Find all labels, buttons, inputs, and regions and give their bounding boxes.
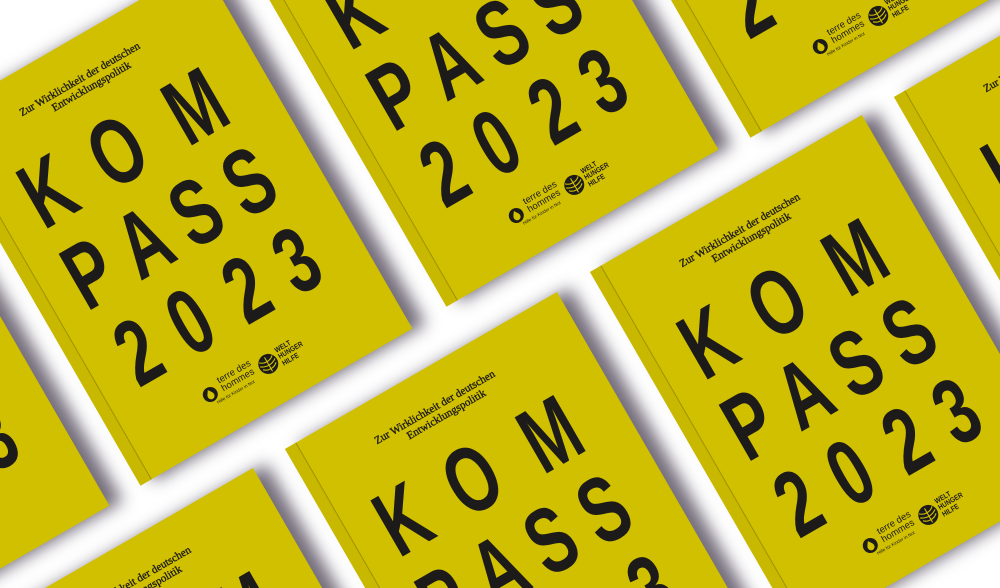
book: bottom center, partial — [285, 292, 767, 588]
book: main right cover — [590, 115, 1000, 588]
title: KOMPASS 2023: 2 — [511, 55, 594, 164]
title: KOMPASS 2023: 2 — [205, 234, 288, 343]
book: bottom left, partial — [0, 468, 463, 588]
logo: terre des hommes: Hilfe für Kinder in Not — [216, 379, 256, 405]
logo: terre des hommes — [202, 358, 257, 405]
subtitle: Zur Wirklichkeit der deutschen — [677, 191, 802, 270]
title: KOMPASS 2023 — [357, 375, 693, 588]
logo: terre des hommes: Hilfe für Kinder in Not — [876, 530, 916, 556]
title: KOMPASS 2023: S — [864, 276, 954, 388]
title: KOMPASS 2023: S — [559, 453, 649, 565]
subtitle: Entwicklungspolitik — [405, 387, 488, 442]
logo: terre des hommes — [508, 179, 563, 226]
title: KOMPASS 2023: S — [151, 156, 241, 268]
title: KOMPASS 2023 — [2, 47, 338, 406]
title: KOMPASS 2023: 2 — [756, 448, 840, 557]
spine — [894, 90, 1000, 462]
book: far right, partial — [894, 0, 1000, 462]
logo: Welthungerhilfe: HUNGER — [583, 161, 611, 182]
title: KOMPASS 2023: 3 — [561, 26, 644, 135]
title: KOMPASS 2023: M — [501, 375, 599, 493]
title: KOMPASS 2023: O — [729, 244, 825, 360]
book: top middle, partial — [236, 0, 718, 307]
title: KOMPASS 2023: M — [806, 198, 904, 316]
logo: Welthungerhilfe: HILFE — [940, 502, 960, 518]
title: KOMPASS 2023 — [308, 0, 644, 227]
logo: Welthungerhilfe: HILFE — [586, 172, 606, 188]
title: KOMPASS 2023: 3 — [915, 356, 998, 465]
logo: Welthungerhilfe: WELT — [273, 338, 292, 355]
logo: terre des hommes: terre des — [521, 179, 559, 207]
logo: terre des hommes — [862, 509, 917, 556]
subtitle: Entwicklungspolitik — [50, 59, 133, 114]
logo: Welthungerhilfe: HILFE — [890, 3, 910, 19]
logo: Welthungerhilfe: HUNGER — [937, 491, 965, 512]
logo: Welthungerhilfe — [564, 159, 611, 195]
logo: Welthungerhilfe: WELT — [579, 159, 598, 176]
logo: Welthungerhilfe: HUNGER — [277, 340, 305, 361]
title: KOMPASS 2023: A — [404, 6, 496, 120]
title: KOMPASS 2023 — [662, 198, 998, 557]
title: KOMPASS 2023: K — [662, 285, 754, 399]
logo: Welthungerhilfe — [258, 338, 305, 374]
logo: terre des hommes: hommes — [830, 18, 867, 46]
title: KOMPASS 2023: 0 — [148, 267, 232, 376]
book: top right, partial — [540, 0, 1000, 138]
title: KOMPASS 2023: A — [758, 336, 850, 450]
subtitle: Zur Wirklichkeit der deutschen — [372, 368, 497, 447]
title: KOMPASS 2023: O — [424, 421, 520, 537]
book: far left, partial — [0, 141, 109, 588]
title: KOMPASS 2023: S — [811, 307, 901, 419]
title: KOMPASS 2023: A — [98, 185, 190, 299]
title: KOMPASS 2023: 0 — [808, 418, 892, 527]
title: KOMPASS 2023: P — [705, 368, 794, 480]
logo: terre des hommes: Hilfe für Kinder in Not — [522, 200, 562, 226]
logo: Welthungerhilfe: HILFE — [280, 351, 300, 367]
subtitle: Entwicklungspolitik — [710, 210, 793, 265]
title: KOMPASS 2023: 2 — [96, 297, 180, 406]
title: KOMPASS 2023: O — [69, 93, 165, 209]
spine — [540, 0, 762, 138]
title: KOMPASS 2023: 2 — [865, 385, 948, 494]
logo: terre des hommes: terre des — [215, 358, 253, 386]
book: main left cover — [0, 0, 412, 486]
title: KOMPASS 2023: K — [2, 134, 94, 248]
logo: terre des hommes: terre des — [825, 10, 863, 38]
title: KOMPASS 2023: M — [146, 47, 244, 165]
title: KOMPASS 2023: P — [45, 217, 134, 329]
title: KOMPASS 2023: 0 — [454, 88, 538, 197]
spine — [0, 114, 152, 486]
title: KOMPASS 2023: K — [357, 462, 449, 576]
logo: terre des hommes: hommes — [880, 517, 917, 545]
spine — [236, 0, 458, 307]
logo: Welthungerhilfe — [868, 0, 915, 26]
spine — [285, 442, 507, 588]
logo: Welthungerhilfe: WELT — [933, 489, 952, 506]
logo: terre des hommes: Hilfe für Kinder in Not — [826, 31, 866, 57]
spine — [590, 266, 812, 588]
logo: Welthungerhilfe — [918, 489, 965, 525]
title: KOMPASS 2023: 3 — [255, 205, 338, 314]
title: KOMPASS 2023: P — [351, 38, 440, 150]
logo: terre des hommes: hommes — [220, 366, 257, 394]
logo: terre des hommes: hommes — [526, 187, 563, 215]
logo: terre des hommes: terre des — [875, 509, 913, 537]
logo: terre des hommes — [812, 10, 867, 57]
title: KOMPASS 2023: 2 — [402, 118, 486, 227]
subtitle: Zur Wirklichkeit der deutschen — [17, 40, 142, 119]
title: KOMPASS 2023: S — [204, 125, 294, 237]
